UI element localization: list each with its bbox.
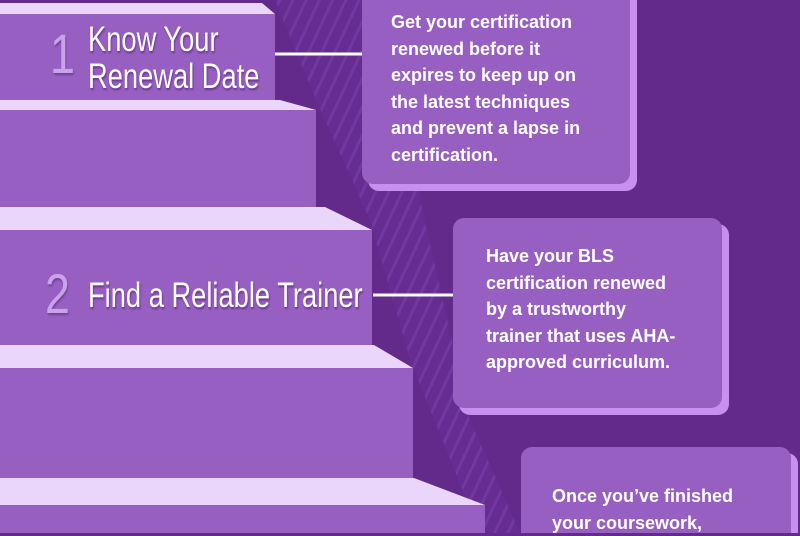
- box 1 text: [391, 12, 580, 165]
- step 1: [0, 3, 275, 100]
- step 2: [0, 100, 316, 207]
- striped side shading: [265, 0, 520, 533]
- box 1 text: certification.: [391, 145, 498, 165]
- box 2 text: [486, 246, 675, 372]
- box 1 text: expires to keep up on: [391, 65, 576, 85]
- box 1 text: Get your certification: [391, 12, 572, 32]
- box 2 text: Have your BLS: [486, 246, 614, 266]
- title 2: Find a Reliable Trainer: [88, 276, 363, 315]
- box 2 text: by a trustworthy: [486, 299, 626, 319]
- box 2 text: certification renewed: [486, 273, 666, 293]
- box 1 text: renewed before it: [391, 39, 540, 59]
- step 3: [0, 207, 372, 345]
- box 1 text: the latest techniques: [391, 92, 570, 112]
- box 2 text: approved curriculum.: [486, 352, 670, 372]
- box 3 text: your coursework,: [552, 513, 702, 533]
- box 3 text: [552, 486, 733, 533]
- box 3 text: Once you’ve finished: [552, 486, 733, 506]
- title 1: Renewal Date: [88, 57, 259, 96]
- box 2 text: trainer that uses AHA-: [486, 326, 675, 346]
- box 1: [362, 0, 637, 191]
- number 1: 1: [50, 22, 75, 85]
- box 3: [521, 447, 798, 536]
- connector 2: [373, 294, 454, 296]
- title 1: Know Your: [88, 20, 219, 59]
- step 4: [0, 345, 413, 478]
- box 2: [453, 218, 729, 415]
- title 1: [88, 20, 260, 96]
- step 5: [0, 478, 485, 533]
- box 1 text: and prevent a lapse in: [391, 118, 580, 138]
- number 2: 2: [45, 262, 70, 325]
- connector 1: [275, 52, 362, 56]
